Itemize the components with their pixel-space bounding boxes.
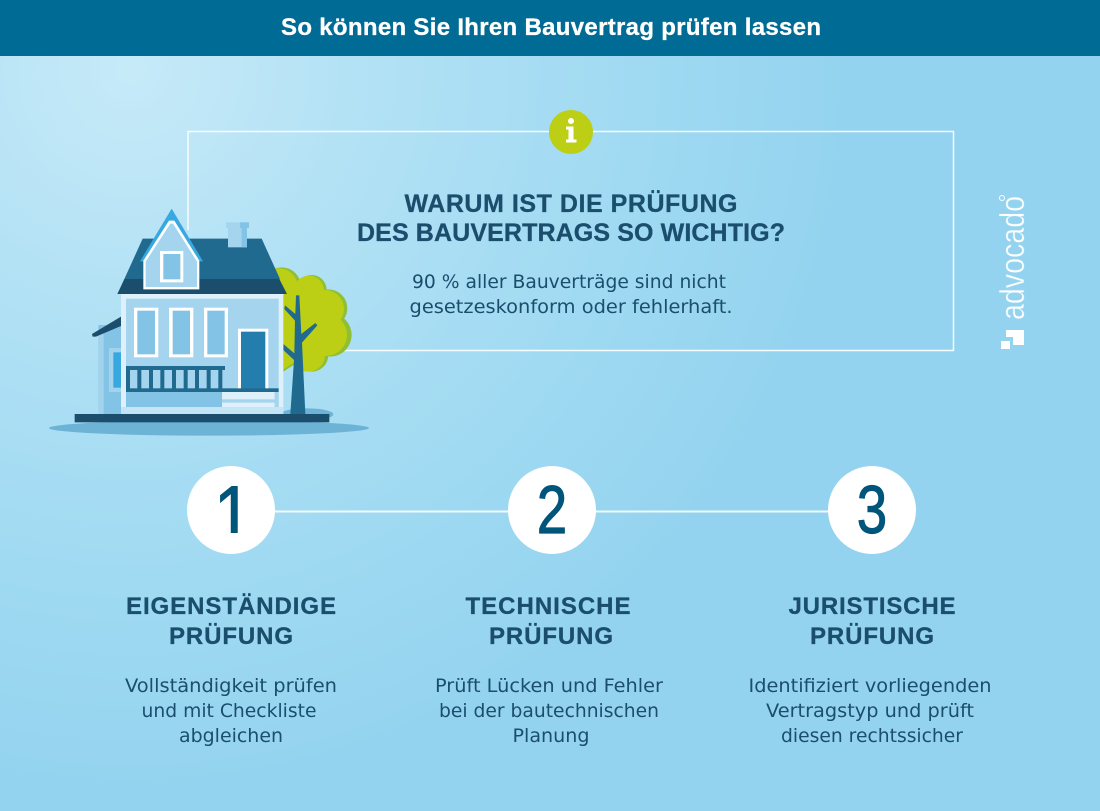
step 3 heading [788,593,956,650]
dormer [140,209,203,289]
roof [117,239,287,294]
step 1 text: und mit Checkliste [142,700,316,722]
panel heading: WARUM IST DIE PRÜFUNG [404,189,738,218]
panel body text [410,271,732,318]
door [238,329,268,392]
tree trunk [283,295,317,414]
step 2 text: bei der bautechnischen [439,700,659,722]
panel body text: 90 % aller Bauverträge sind nicht [412,271,726,293]
title: So können Sie Ihren Bauvertrag prüfen lassen [281,14,821,41]
ground slab [75,414,329,422]
porch railing [126,366,279,392]
step 1 text [125,675,337,747]
step 3: 3 [857,472,887,548]
house body [121,294,283,414]
step 1 heading: EIGENSTÄNDIGE [126,593,336,620]
panel: info frame [188,132,954,350]
header bar [0,0,1100,56]
panel heading: DES BAUVERTRAGS SO WICHTIG? [357,219,785,247]
side annex [92,317,122,414]
step 3 text: Vertragstyp und prüft [766,700,974,722]
step 1 heading [126,593,336,650]
step 2 heading: TECHNISCHE [466,593,630,620]
step 2 text: Planung [512,725,590,747]
panel body text: gesetzeskonform oder fehlerhaft. [410,296,732,318]
step 1: 1 [214,469,252,559]
step 1 text: Vollständigkeit prüfen [125,675,337,697]
step 1 heading: PRÜFUNG [169,623,293,650]
panel heading [357,189,785,247]
step 3 text [748,675,992,747]
icon: info [549,110,593,154]
step 3 heading: PRÜFUNG [810,623,934,650]
logo: advocado: advocado [994,196,1032,320]
step 2 text: Prüft Lücken und Fehler [435,675,663,697]
step 3 text: Identifiziert vorliegenden [748,675,992,697]
windows [134,308,228,357]
step 2 heading [466,593,630,650]
step 2 heading: PRÜFUNG [489,623,613,650]
connector line [231,510,872,512]
chimney [226,222,249,247]
step 1 [125,466,337,747]
step 2 text [435,675,663,747]
step 1 text: abgleichen [179,725,283,747]
ground shadow [49,420,369,436]
step 2 [435,466,663,747]
step 3 [748,466,992,747]
step 3 heading: JURISTISCHE [788,593,956,620]
icon: house with tree [49,209,369,436]
step 3 text: diesen rechtssicher [781,725,963,747]
step 2: 2 [537,472,567,548]
tree crown [259,267,352,372]
